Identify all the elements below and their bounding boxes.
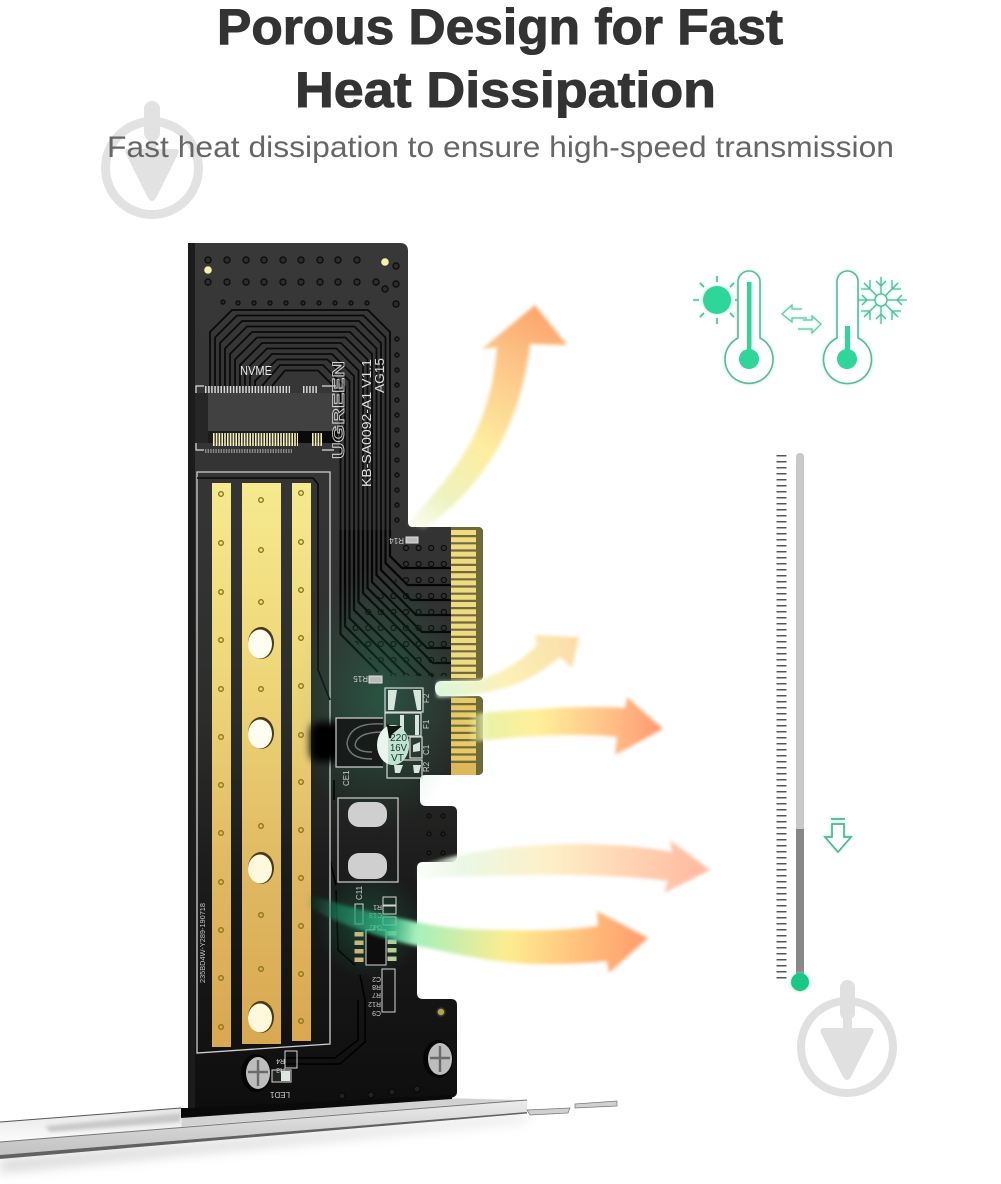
icon: exchange arrows [782,305,821,333]
scale ticks [776,455,786,979]
bracket: end tabs [527,1101,617,1115]
icon: hot thermometer with sun [693,271,773,383]
heat plate inner contour [197,478,330,700]
silkscreen labels around chip: R3 [276,1066,285,1073]
connector lower thin pins [205,449,292,453]
mercury [747,282,752,352]
heat arrow 5 [305,893,648,973]
capacitor lead outline [347,724,383,759]
silkscreen labels around chip [269,885,382,1099]
silkscreen labels near fingers: R2 [422,761,431,772]
via holes: pale corner pads [204,258,389,274]
silkscreen labels near fingers: R15 [353,674,368,683]
capacitor 220 16V: 16V [390,742,407,754]
heat plate frame [197,472,330,1053]
silkscreen: AG15: AG15 [372,358,387,393]
silkscreen labels around chip: C13 [369,911,382,918]
snowflake [858,277,907,324]
copper traces: to gold fingers [340,530,451,677]
via holes: top rows [205,257,399,522]
via holes: mounting ears [339,814,445,1099]
copper traces: lower board [285,780,365,1064]
bracket: back section [0,1108,181,1142]
capacitor 220 16V: 220 [390,732,407,744]
heat plate holes [248,627,274,1033]
heat arrow 3 [470,697,663,755]
thermometer outline [725,271,773,383]
pcb left edge [188,243,195,1111]
capacitor 220 16V: VT [391,752,405,764]
silkscreen labels around chip: R1 [373,903,382,910]
mounting ear gold pad [437,1008,445,1016]
silkscreen: UGREEN logo: UGREEN [329,361,348,459]
gold fingers: lower group [451,698,476,775]
pcb bottom lip [181,1095,452,1118]
thermal pad frame [338,798,398,882]
title: Heat Dissipation [295,62,716,118]
capacitor shadow [310,722,344,762]
resistor pads R14 R15 [369,537,418,683]
gold fingers: top group [451,530,476,678]
thermometer outline [824,271,871,384]
silkscreen labels around chip: C12 [369,923,382,930]
capacitor 220 16V [377,725,409,765]
silkscreen labels around chip: C9 [372,1009,381,1016]
led [272,1070,291,1082]
silkscreen labels around chip: R7 [372,991,381,998]
bracket: front bottom edge [0,1112,527,1159]
title [217,0,783,118]
sun [703,286,731,314]
silkscreen labels near fingers: F2 [422,693,431,703]
heat arrow 2 [437,635,579,697]
silkscreen labels around chip: R12 [368,1000,381,1007]
bracket: silver strip under board [181,1098,527,1127]
silkscreen labels near fingers: CE1 [342,770,351,786]
silkscreen labels near fingers: F1 [422,719,431,729]
bracket shadow [0,1116,527,1172]
mercury [845,326,850,356]
green heat glow on board [295,570,465,830]
silkscreen labels near fingers: R14 [389,536,404,545]
silkscreen labels around chip: C2 [372,975,381,982]
silkscreen: plate code: 235BD4W-Y289-190718 [200,903,207,983]
connector corner marks [196,386,336,450]
copper traces: top octagon [210,310,390,530]
green heat glow near chip [315,870,425,980]
chip [359,927,392,966]
scale rail upper [796,453,804,829]
via holes: finger area [345,540,450,676]
title: Porous Design for Fast [217,0,783,55]
connector gold pins [213,433,298,446]
silkscreen: NVME: NVME [240,363,272,378]
silkscreen labels around chip: R8 [372,983,381,990]
small component pads around chip [285,897,396,1068]
icon: down arrow [825,819,851,852]
component pads near capacitor [388,690,421,773]
screw right [423,1040,453,1078]
capacitor socket frame [336,718,383,767]
watermark icon: bottom right [797,980,897,1097]
icon: cold thermometer with snowflake [824,271,907,384]
heat arrow 1 [408,305,567,529]
chip legs [354,932,364,966]
silkscreen labels near fingers [342,536,431,786]
connector body [195,393,338,443]
silkscreen: model number: KB-SA0092-A1 V1.1 [359,359,374,487]
connector top pins [205,386,290,393]
scale rail lower [796,829,804,979]
component frames near capacitor [385,688,423,778]
silkscreen labels around chip: LED1 [269,1090,290,1099]
heat plate screw dots [219,491,303,1029]
bracket: back top edge [0,1108,181,1122]
silkscreen labels around chip: R4 [276,1057,285,1064]
bracket: back inner shade [45,1113,181,1132]
bracket: front top edge [0,1100,527,1142]
screw left [241,1054,271,1092]
watermark icon: top left [101,101,203,219]
gold finger backing [451,527,483,775]
temperature scale [782,453,809,991]
thermal pads [348,802,387,879]
scale bulb [791,973,809,991]
subtitle: Fast heat dissipation to ensure high-speed transmission [107,131,894,164]
bracket: front section [0,1100,527,1155]
m.2 connector [195,386,338,451]
heat arrow 4 [418,840,710,893]
silkscreen labels near fingers: C1 [422,744,431,755]
silkscreen labels around chip: C11 [355,885,364,900]
gold heat plate strips [212,483,311,1047]
pcb board [188,243,483,1112]
